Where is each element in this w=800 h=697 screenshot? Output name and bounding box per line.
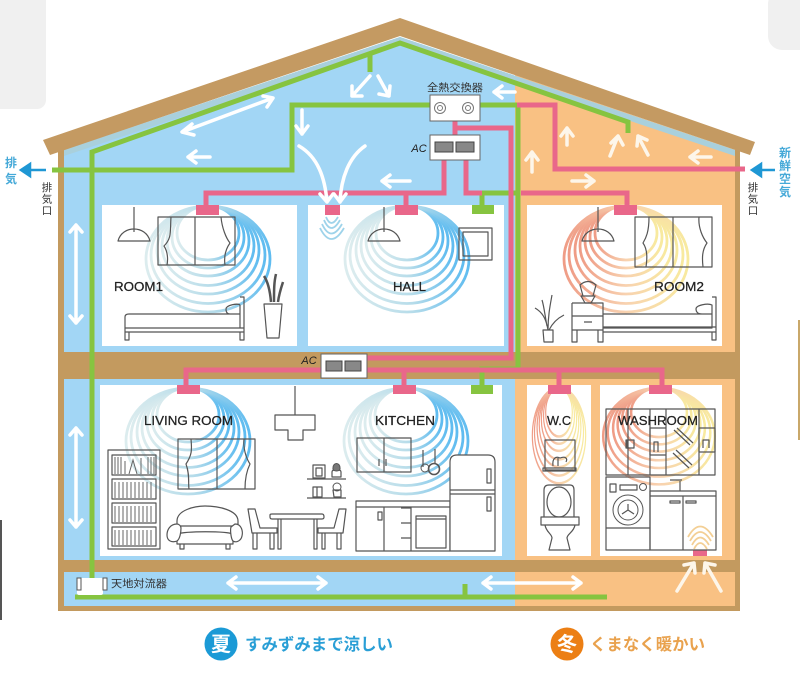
AC unit: upper xyxy=(430,135,480,160)
label: WASHROOM: WASHROOM xyxy=(618,414,698,428)
convector unit xyxy=(77,578,107,595)
room: WASHROOM xyxy=(600,385,722,556)
furniture: WASHROOM xyxy=(606,409,716,550)
rings: ROOM1 xyxy=(146,206,270,312)
air rings xyxy=(126,206,715,549)
warm right arrow xyxy=(572,175,594,187)
heat exchanger label: 全熱交換器 xyxy=(427,81,484,94)
floor band: lower xyxy=(58,560,740,572)
curved arrow right xyxy=(334,146,365,202)
floor vent arrow left xyxy=(677,563,695,591)
AC label: upper: AC xyxy=(410,143,427,155)
room: ROOM2 xyxy=(527,205,722,346)
down arrow xyxy=(296,110,308,134)
heat exchanger unit xyxy=(430,95,480,121)
rings: W.C xyxy=(532,388,586,483)
down-right arrow xyxy=(378,76,390,96)
winter badge glyph: 冬 xyxy=(557,633,577,656)
room: ROOM1 xyxy=(102,205,297,346)
warm arrow 4 xyxy=(637,136,648,155)
fresh air arrow xyxy=(752,164,775,176)
equipment xyxy=(77,81,484,595)
attic double arrow xyxy=(182,96,273,135)
winter caption: くまなく暖かい xyxy=(590,635,705,654)
exhaust arrow xyxy=(21,164,46,176)
diffuser wave: hall xyxy=(320,217,344,239)
vent port label left: 排 xyxy=(42,181,53,194)
label: ROOM1: ROOM1 xyxy=(114,280,163,294)
vent port label right: 排 xyxy=(748,181,759,194)
fresh air label: 気 xyxy=(779,184,791,199)
label: LIVING ROOM: LIVING ROOM xyxy=(144,414,233,428)
furniture: W.C xyxy=(541,414,579,550)
green exhaust ducts xyxy=(52,43,628,597)
house structure xyxy=(43,18,755,611)
white airflow arrows xyxy=(70,76,721,591)
left arrow at exchanger xyxy=(494,86,515,98)
green register: upper floor xyxy=(472,205,494,214)
furniture: KITCHEN xyxy=(356,414,495,551)
label: HALL: HALL xyxy=(393,280,426,294)
panel: winter (orange) interior xyxy=(515,75,735,611)
label: ROOM2: ROOM2 xyxy=(654,280,704,294)
furniture: HALL xyxy=(368,207,492,294)
convector label: 天地対流器 xyxy=(111,577,168,590)
summer caption: すみずみまで涼しい xyxy=(245,635,393,654)
diffuser wave: washroom floor xyxy=(688,526,713,549)
warm left arrow xyxy=(690,151,711,163)
crawl arrow right xyxy=(483,577,581,589)
warm arrow 3 xyxy=(610,136,623,156)
rings: KITCHEN xyxy=(344,388,468,494)
summer badge glyph: 夏 xyxy=(211,634,231,656)
left arrow attic xyxy=(188,151,210,163)
left arrow hall xyxy=(382,175,410,187)
furniture: ROOM2 xyxy=(535,207,716,342)
down-left arrow xyxy=(352,76,370,96)
AC label: lower: AC xyxy=(300,355,317,367)
room: HALL xyxy=(308,205,504,346)
legend: winter xyxy=(550,628,705,660)
summer badge xyxy=(204,628,238,660)
exhaust label: 排 xyxy=(5,155,17,170)
rings: ROOM2 xyxy=(564,206,688,312)
vent port label left: 口 xyxy=(42,205,52,217)
warm arrows xyxy=(526,152,538,172)
AC unit: lower xyxy=(321,354,367,378)
label: W.C: W.C xyxy=(547,414,571,428)
curved arrow left xyxy=(299,146,333,202)
crawl arrow left xyxy=(228,577,326,589)
furniture: LIVING ROOM xyxy=(108,386,346,549)
fresh air label: 新 xyxy=(779,145,791,160)
rings: WASHROOM xyxy=(603,388,715,484)
rings: LIVING ROOM xyxy=(126,388,250,494)
green register: lower floor xyxy=(471,385,493,394)
outside labels xyxy=(5,145,791,217)
wall arrow upper xyxy=(70,225,82,323)
rings: HALL xyxy=(345,206,469,312)
wall and floor structure xyxy=(58,150,740,611)
furniture: ROOM1 xyxy=(114,207,283,340)
label: KITCHEN: KITCHEN xyxy=(375,414,435,428)
pink supply ducts xyxy=(177,105,745,556)
floor vent arrow right xyxy=(704,563,721,591)
roof xyxy=(43,18,755,155)
vent port label right: 気 xyxy=(748,192,759,206)
room: LIVING and KITCHEN xyxy=(100,385,502,556)
supply grilles xyxy=(177,205,707,556)
exhaust label 2: 気 xyxy=(5,171,17,186)
legend: summer xyxy=(204,628,393,660)
vent port label right: 口 xyxy=(748,205,758,217)
floor band: upper xyxy=(58,352,740,379)
room: W.C xyxy=(527,385,591,556)
warm arrow 2 xyxy=(561,128,573,145)
vent port label left: 気 xyxy=(42,192,53,206)
fresh air label: 鮮 xyxy=(779,158,791,173)
winter badge xyxy=(550,628,584,660)
roof under-strip xyxy=(64,37,735,156)
wall arrow lower xyxy=(70,428,82,527)
panel: summer (blue) interior xyxy=(64,37,516,611)
fresh air label: 空 xyxy=(779,171,791,186)
